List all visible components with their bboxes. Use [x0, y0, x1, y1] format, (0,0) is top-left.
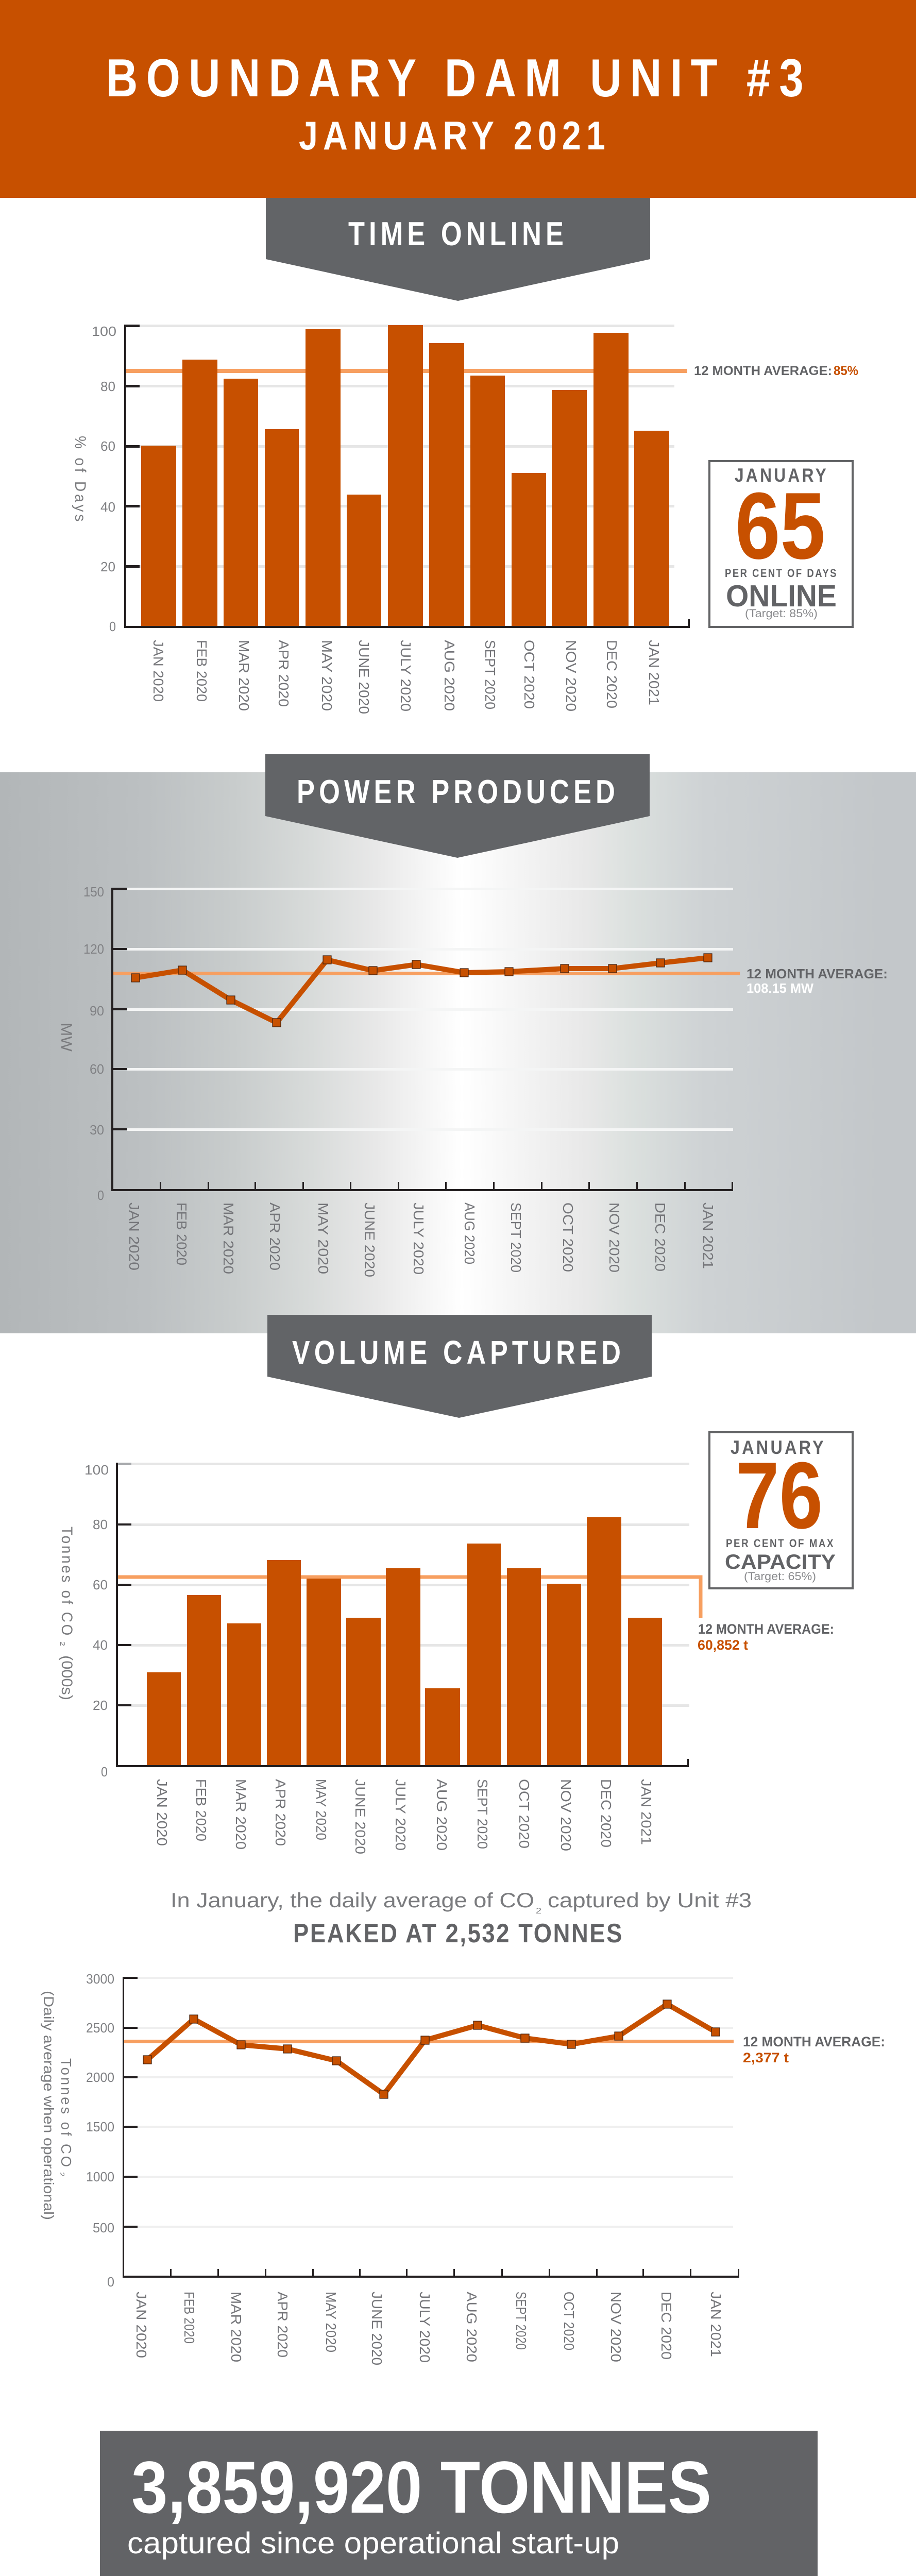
y axis labels: daily average [86, 1971, 114, 2290]
section banner: volume captured: VOLUME CAPTURED [292, 1334, 625, 1371]
section banner: time online [266, 198, 650, 301]
callout: january 76 per cent of max capacity: JANUARY [731, 1437, 826, 1458]
data markers: daily average [143, 2000, 720, 2098]
y axis labels: power produced: 30 [90, 1122, 104, 1138]
month labels: time online: JAN 2021 [646, 640, 662, 705]
y axis labels: volume captured: 60 [93, 1577, 108, 1592]
month labels: volume captured [154, 1779, 654, 1854]
month labels: daily average: MAR 2020 [228, 2292, 244, 2362]
y axis labels: volume captured: 0 [101, 1764, 108, 1780]
average line: power produced [112, 972, 740, 975]
month labels: daily average: JULY 2020 [417, 2292, 433, 2363]
month labels: volume captured: MAY 2020 [313, 1779, 329, 1840]
subtitle: JANUARY 2021 [299, 113, 610, 158]
y axis labels: power produced: 120 [83, 941, 104, 957]
text block: daily average intro: 2 [536, 1907, 541, 1916]
average line: time online [126, 369, 687, 373]
average line: volume captured [117, 1577, 701, 1618]
y axis labels: time online: 60 [100, 438, 115, 454]
average label: volume captured: 12 MONTH AVERAGE: [698, 1621, 834, 1637]
bars: time online [141, 325, 669, 626]
month labels: daily average: JAN 2021 [708, 2292, 724, 2357]
month labels: daily average: MAY 2020 [323, 2292, 339, 2352]
month labels: power produced: MAR 2020 [220, 1202, 236, 1274]
y axis labels: time online: 0 [109, 619, 116, 634]
month labels: time online: JULY 2020 [398, 640, 414, 711]
y axis labels: volume captured: 100 [84, 1462, 109, 1478]
big number: 3,859,920 TONNES [131, 2447, 711, 2529]
y axis labels: time online: 20 [100, 559, 115, 574]
y axis labels: power produced [83, 884, 104, 1203]
y axis labels: volume captured: 20 [93, 1698, 108, 1713]
bar chart: volume captured [58, 1462, 834, 1854]
y axis labels: daily average: 2500 [86, 2020, 114, 2036]
month labels: time online: MAR 2020 [236, 640, 252, 711]
average label: power produced: 108.15 MW [747, 980, 813, 996]
y axis title: daily average [41, 1991, 74, 2220]
y axis title: power produced: MW [58, 1023, 75, 1052]
average label: power produced: 12 MONTH AVERAGE: [747, 966, 888, 981]
average label: volume captured [698, 1621, 834, 1653]
axes: time online [124, 325, 690, 628]
y axis labels: time online: 40 [100, 499, 115, 515]
month labels: time online: MAY 2020 [319, 640, 335, 711]
y axis title: daily average: (Daily average when operational) [41, 1991, 57, 2220]
average line: daily average [123, 2040, 734, 2043]
y axis labels: daily average: 500 [93, 2220, 114, 2235]
text block: daily average intro [171, 1889, 752, 1916]
caption: captured since operational start-up [127, 2527, 619, 2560]
y axis labels: volume captured: 80 [93, 1517, 108, 1532]
month labels: time online: JAN 2020 [150, 640, 166, 702]
y axis labels: daily average: 1000 [86, 2169, 114, 2184]
callout: january 65 per cent online [709, 461, 853, 627]
text block: daily average intro: In January, the daily average of CO [171, 1889, 534, 1912]
y axis labels: power produced: 0 [97, 1188, 104, 1203]
month labels: time online: APR 2020 [276, 640, 292, 707]
callout: january 65 per cent online: ONLINE [726, 579, 837, 613]
month labels: power produced: JAN 2021 [700, 1202, 716, 1269]
callout: january 76 per cent of max capacity: (Target: 65%) [744, 1570, 816, 1583]
month labels: daily average: JUNE 2020 [369, 2292, 385, 2365]
month labels: time online: SEPT 2020 [482, 640, 498, 709]
month labels: volume captured: JAN 2020 [154, 1779, 170, 1846]
month labels: volume captured: SEPT 2020 [474, 1779, 490, 1849]
y axis title: volume captured [58, 1527, 75, 1700]
y axis title: volume captured: (000s) [58, 1655, 75, 1700]
month labels: daily average: JAN 2020 [133, 2292, 149, 2358]
axes: volume captured [116, 1463, 689, 1767]
month labels: power produced: DEC 2020 [652, 1202, 668, 1272]
bar chart: time online [72, 324, 858, 714]
y axis labels: power produced: 60 [90, 1061, 104, 1077]
header band [0, 0, 916, 198]
month labels: volume captured: DEC 2020 [598, 1779, 614, 1848]
month labels: time online: AUG 2020 [442, 640, 457, 711]
panel: total tonnes captured [100, 2431, 818, 2576]
y axis labels: power produced: 90 [90, 1003, 104, 1019]
month labels: power produced [126, 1202, 716, 1277]
month labels: power produced: NOV 2020 [606, 1202, 622, 1273]
month labels: daily average: AUG 2020 [464, 2292, 480, 2362]
month labels: volume captured: FEB 2020 [193, 1779, 209, 1841]
y axis labels: power produced: 150 [83, 884, 104, 900]
average label: time online: 85% [834, 364, 858, 378]
y axis labels: volume captured [84, 1462, 109, 1780]
month labels: volume captured: NOV 2020 [558, 1779, 574, 1851]
y axis title: volume captured: 2 [59, 1641, 66, 1646]
month labels: daily average: DEC 2020 [658, 2292, 674, 2360]
y axis labels: time online: 80 [100, 379, 115, 394]
data line: power produced [135, 958, 708, 1023]
callout: january 65 per cent online: 65 [735, 472, 825, 579]
month labels: power produced: JUNE 2020 [362, 1202, 378, 1277]
average label: daily average: 2,377 t [743, 2050, 789, 2065]
y axis labels: time online: 100 [92, 324, 116, 339]
month labels: power produced: SEPT 2020 [508, 1202, 524, 1273]
callout: january 76 per cent of max capacity: PER CENT OF MAX [726, 1537, 835, 1550]
y axis labels: daily average: 0 [107, 2274, 114, 2290]
y axis title: time online: % of Days [72, 436, 89, 524]
month labels: time online: FEB 2020 [194, 640, 210, 702]
section banner: power produced: POWER PRODUCED [297, 773, 619, 810]
bars: volume captured [147, 1517, 662, 1766]
y axis labels: daily average: 2000 [86, 2070, 114, 2085]
section banner: time online: TIME ONLINE [348, 215, 568, 252]
callout: january 76 per cent of max capacity: CAPACITY [725, 1551, 836, 1573]
month labels: volume captured: MAR 2020 [233, 1779, 249, 1850]
month labels: power produced: AUG 2020 [462, 1202, 478, 1264]
month labels: power produced: OCT 2020 [560, 1202, 576, 1272]
month labels: daily average: OCT 2020 [561, 2292, 577, 2350]
text block: daily average intro: captured by Unit #3 [548, 1889, 752, 1912]
month labels: power produced: APR 2020 [267, 1202, 283, 1270]
month labels: power produced: MAY 2020 [315, 1202, 331, 1274]
average label: volume captured: 60,852 t [698, 1637, 748, 1653]
heading: peaked at 2,532 tonnes: PEAKED AT 2,532 TONNES [293, 1919, 623, 1948]
axes: power produced [111, 888, 733, 1191]
y axis labels: daily average: 3000 [86, 1971, 114, 1987]
callout: january 76 per cent of max capacity [709, 1432, 853, 1588]
y axis labels: volume captured: 40 [93, 1637, 108, 1653]
data line: daily average [147, 2004, 716, 2094]
month labels: volume captured: AUG 2020 [434, 1779, 450, 1851]
data markers: power produced [131, 954, 712, 1027]
callout: january 65 per cent online: JANUARY [735, 465, 828, 486]
month labels: daily average: SEPT 2020 [513, 2292, 529, 2350]
month labels: daily average [133, 2292, 724, 2365]
callout: january 65 per cent online: (Target: 85%) [745, 607, 818, 620]
month labels: power produced: JULY 2020 [411, 1202, 427, 1275]
average label: time online: 12 MONTH AVERAGE: [694, 364, 832, 378]
callout: january 76 per cent of max capacity: 76 [736, 1442, 823, 1548]
section banner: power produced [265, 754, 650, 858]
month labels: volume captured: OCT 2020 [516, 1779, 532, 1849]
y axis title: daily average: 2 [58, 2172, 66, 2177]
month labels: time online: JUNE 2020 [356, 640, 372, 714]
average label: power produced [747, 966, 888, 996]
axes: daily average [123, 1977, 739, 2278]
callout: january 65 per cent online: PER CENT OF DAYS [725, 567, 838, 580]
month labels: daily average: FEB 2020 [181, 2292, 197, 2344]
y axis labels: time online [92, 324, 116, 634]
month labels: daily average: APR 2020 [275, 2292, 291, 2358]
month labels: volume captured: APR 2020 [273, 1779, 289, 1846]
month labels: time online: NOV 2020 [563, 640, 579, 711]
month labels: power produced: JAN 2020 [126, 1202, 142, 1270]
panel: power produced background [0, 772, 916, 1333]
line chart: power produced [58, 884, 888, 1277]
average label: daily average: 12 MONTH AVERAGE: [743, 2034, 885, 2049]
y axis labels: daily average: 1500 [86, 2119, 114, 2134]
line chart: daily average captured [41, 1971, 885, 2365]
y axis title: daily average: Tonnes of CO [58, 2058, 74, 2169]
month labels: time online: DEC 2020 [604, 640, 620, 708]
month labels: time online [150, 640, 662, 714]
month labels: time online: OCT 2020 [521, 640, 537, 709]
month labels: daily average: NOV 2020 [608, 2292, 624, 2362]
month labels: volume captured: JULY 2020 [393, 1779, 409, 1851]
y axis title: volume captured: Tonnes of CO [58, 1527, 75, 1637]
month labels: volume captured: JUNE 2020 [352, 1779, 368, 1854]
average label: daily average [743, 2034, 885, 2065]
month labels: volume captured: JAN 2021 [638, 1779, 654, 1845]
month labels: power produced: FEB 2020 [174, 1202, 190, 1265]
section banner: volume captured [267, 1315, 652, 1418]
